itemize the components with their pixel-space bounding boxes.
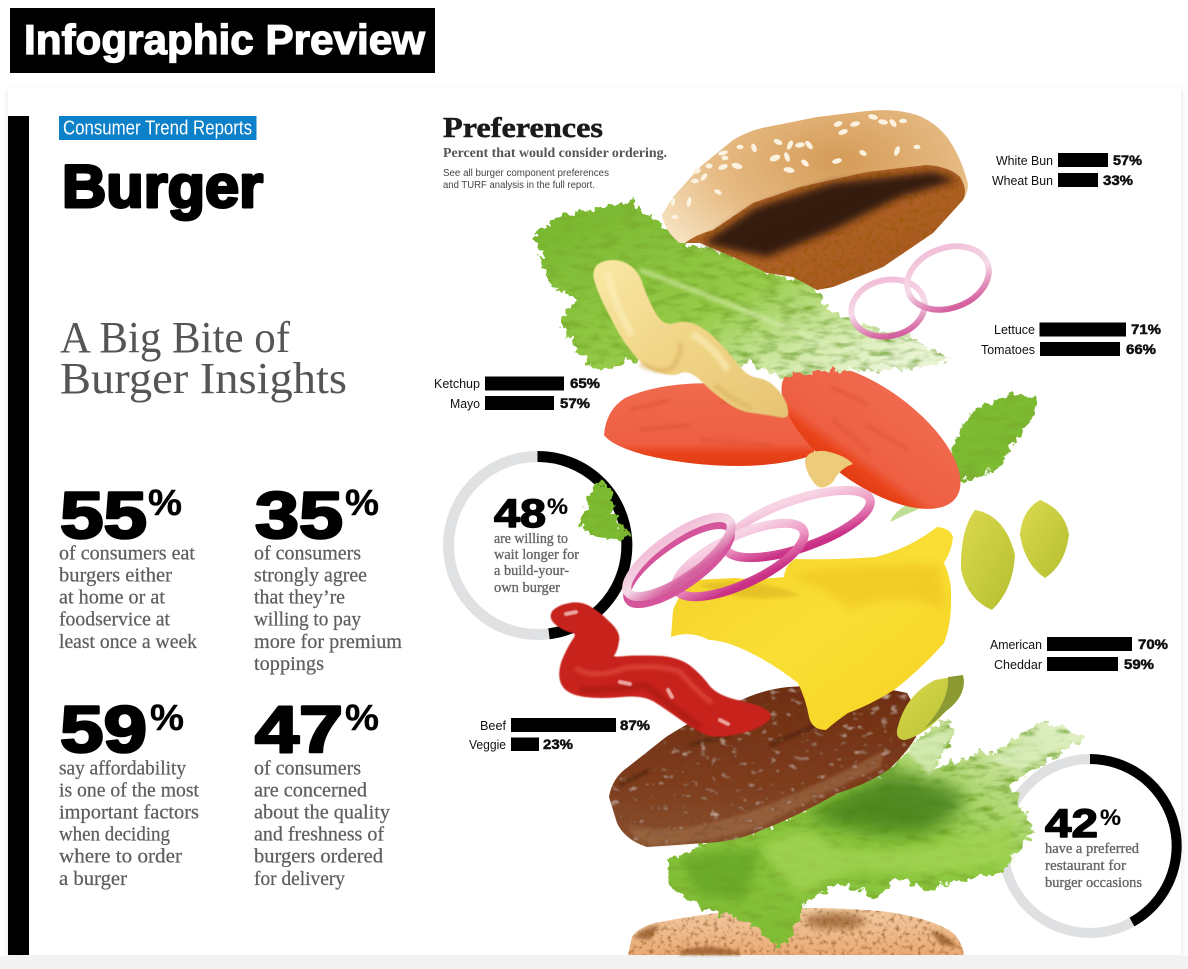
stat: 47%: % <box>345 697 379 738</box>
bottom strip <box>0 956 1188 969</box>
preferences heading block: See all burger component preferences <box>443 168 609 179</box>
donut: 42 percent <box>1003 759 1177 933</box>
bar chart: condiments: 65% <box>570 376 600 391</box>
stat: 55% <box>59 478 197 653</box>
burger: bottom bun <box>628 908 964 955</box>
stat: 35%: strongly agree <box>254 564 367 586</box>
stat: 35%: toppings <box>254 653 324 675</box>
stat: 59%: where to order <box>59 846 182 868</box>
left black bar <box>8 116 29 955</box>
stat: 47%: burgers ordered <box>254 846 383 868</box>
burger: patty <box>609 685 917 847</box>
donut text: 42 percent: burger occasions <box>1045 875 1142 891</box>
bar chart: vegetables: Tomatoes <box>981 342 1035 357</box>
bar chart: vegetables: Lettuce <box>994 322 1035 337</box>
burger: top lettuce <box>533 200 950 377</box>
bar chart: cheese: American <box>990 637 1042 652</box>
stat: 55%: of consumers eat <box>59 542 195 564</box>
burger: top onion rings <box>846 235 998 343</box>
bar chart: buns: Wheat Bun <box>992 173 1053 188</box>
donut text: 42 percent: restaurant for <box>1045 858 1126 874</box>
stat: 59% <box>59 692 199 890</box>
bar chart: buns: 57% <box>1113 153 1142 168</box>
preferences heading block: and TURF analysis in the full report. <box>443 180 595 191</box>
burger: ketchup squiggle <box>553 604 769 735</box>
stat: 55%: 55 <box>60 478 147 552</box>
burger: cheese slice <box>671 527 953 730</box>
donut text: 42 percent <box>1045 802 1142 891</box>
stat: 35%: of consumers <box>254 542 361 564</box>
stat: 59%: 59 <box>60 692 147 766</box>
burger: middle onion rings <box>616 477 878 618</box>
bar chart: patties: 87% <box>620 718 650 733</box>
burger: left tomato <box>604 383 815 466</box>
stat: 47%: are concerned <box>254 780 367 802</box>
stat: 47% <box>254 692 390 890</box>
stat: 55%: least once a week <box>59 631 197 653</box>
bar chart: cheese: 59% <box>1124 657 1154 672</box>
bar chart: patties <box>469 718 650 752</box>
burger: top bun <box>662 110 968 290</box>
burger: mayo blob <box>805 451 853 488</box>
preferences heading block: Percent that would consider ordering. <box>443 145 667 160</box>
burger: pickle slice low <box>897 675 964 740</box>
bar chart: patties: 23% <box>543 737 573 752</box>
stat: 59%: a burger <box>59 868 127 890</box>
stat: 35% <box>254 478 402 675</box>
stat: 55%: % <box>148 482 182 523</box>
title banner: Infographic Preview <box>24 16 425 63</box>
bar chart: vegetables <box>981 322 1161 357</box>
stat: 59%: say affordability <box>59 758 186 780</box>
stat: 35%: % <box>345 482 379 523</box>
bar chart: patties: Beef <box>480 718 506 733</box>
bar chart: cheese: 70% <box>1138 637 1168 652</box>
preferences heading block <box>443 113 667 191</box>
stat: 35%: that they’re <box>254 586 345 608</box>
bar chart: condiments: 57% <box>560 396 590 411</box>
donut: 48 percent <box>448 456 627 634</box>
donut text: 42 percent: have a preferred <box>1045 841 1139 857</box>
burger: mayo squiggle <box>593 260 788 418</box>
bar chart: buns <box>992 153 1142 188</box>
donut text: 42 percent: % <box>1100 805 1121 830</box>
stat: 47%: of consumers <box>254 758 361 780</box>
stat: 47%: and freshness of <box>254 824 384 846</box>
donut text: 48 percent: 48 <box>494 492 546 536</box>
donut text: 48 percent: own burger <box>494 580 560 596</box>
stat: 47%: 47 <box>255 692 343 766</box>
burger: bottom lettuce <box>666 720 1086 947</box>
bar chart: vegetables: 71% <box>1131 322 1161 337</box>
bar chart: buns: White Bun <box>996 153 1053 168</box>
burger: mid lettuce sprig <box>890 395 1036 522</box>
bar chart: condiments: Mayo <box>450 396 480 411</box>
burger: right pickles <box>961 500 1069 610</box>
bar chart: condiments <box>434 376 600 411</box>
donut text: 48 percent: are willing to <box>494 531 568 547</box>
stat: 55%: at home or at <box>59 586 165 608</box>
stat: 55%: burgers either <box>59 564 172 586</box>
lettuce piece on donut <box>581 482 630 540</box>
report tag: Consumer Trend Reports <box>63 118 252 140</box>
bar chart: patties: Veggie <box>469 737 506 752</box>
heading: Burger: Burger <box>62 153 263 220</box>
bar chart: condiments: Ketchup <box>434 376 480 391</box>
stat: 59%: % <box>150 697 184 738</box>
donut text: 48 percent: wait longer for <box>494 547 579 563</box>
subheading: A Big Bite of <box>60 313 290 362</box>
stat: 47%: about the quality <box>254 802 390 824</box>
bar chart: cheese <box>990 637 1168 672</box>
stat: 59%: when deciding <box>59 824 170 846</box>
stat: 55%: foodservice at <box>59 608 170 630</box>
burger: right tomato <box>758 335 984 537</box>
donut text: 42 percent: 42 <box>1045 802 1098 846</box>
donut text: 48 percent <box>494 492 579 596</box>
stat: 59%: is one of the most <box>59 780 199 802</box>
bar chart: vegetables: 66% <box>1126 342 1156 357</box>
bar chart: cheese: Cheddar <box>994 657 1043 672</box>
stat: 35%: willing to pay <box>254 608 361 630</box>
preferences heading block: Preferences <box>443 113 603 144</box>
bar chart: buns: 33% <box>1103 173 1133 188</box>
title banner <box>10 8 435 73</box>
stat: 47%: for delivery <box>254 868 345 890</box>
stat: 35%: 35 <box>255 478 343 552</box>
stat: 59%: important factors <box>59 802 199 824</box>
stat: 35%: more for premium <box>254 631 402 653</box>
subheading: Burger Insights <box>60 354 347 403</box>
donut text: 48 percent: a build-your- <box>494 563 569 579</box>
subheading <box>60 313 347 403</box>
donut text: 48 percent: % <box>547 494 568 519</box>
